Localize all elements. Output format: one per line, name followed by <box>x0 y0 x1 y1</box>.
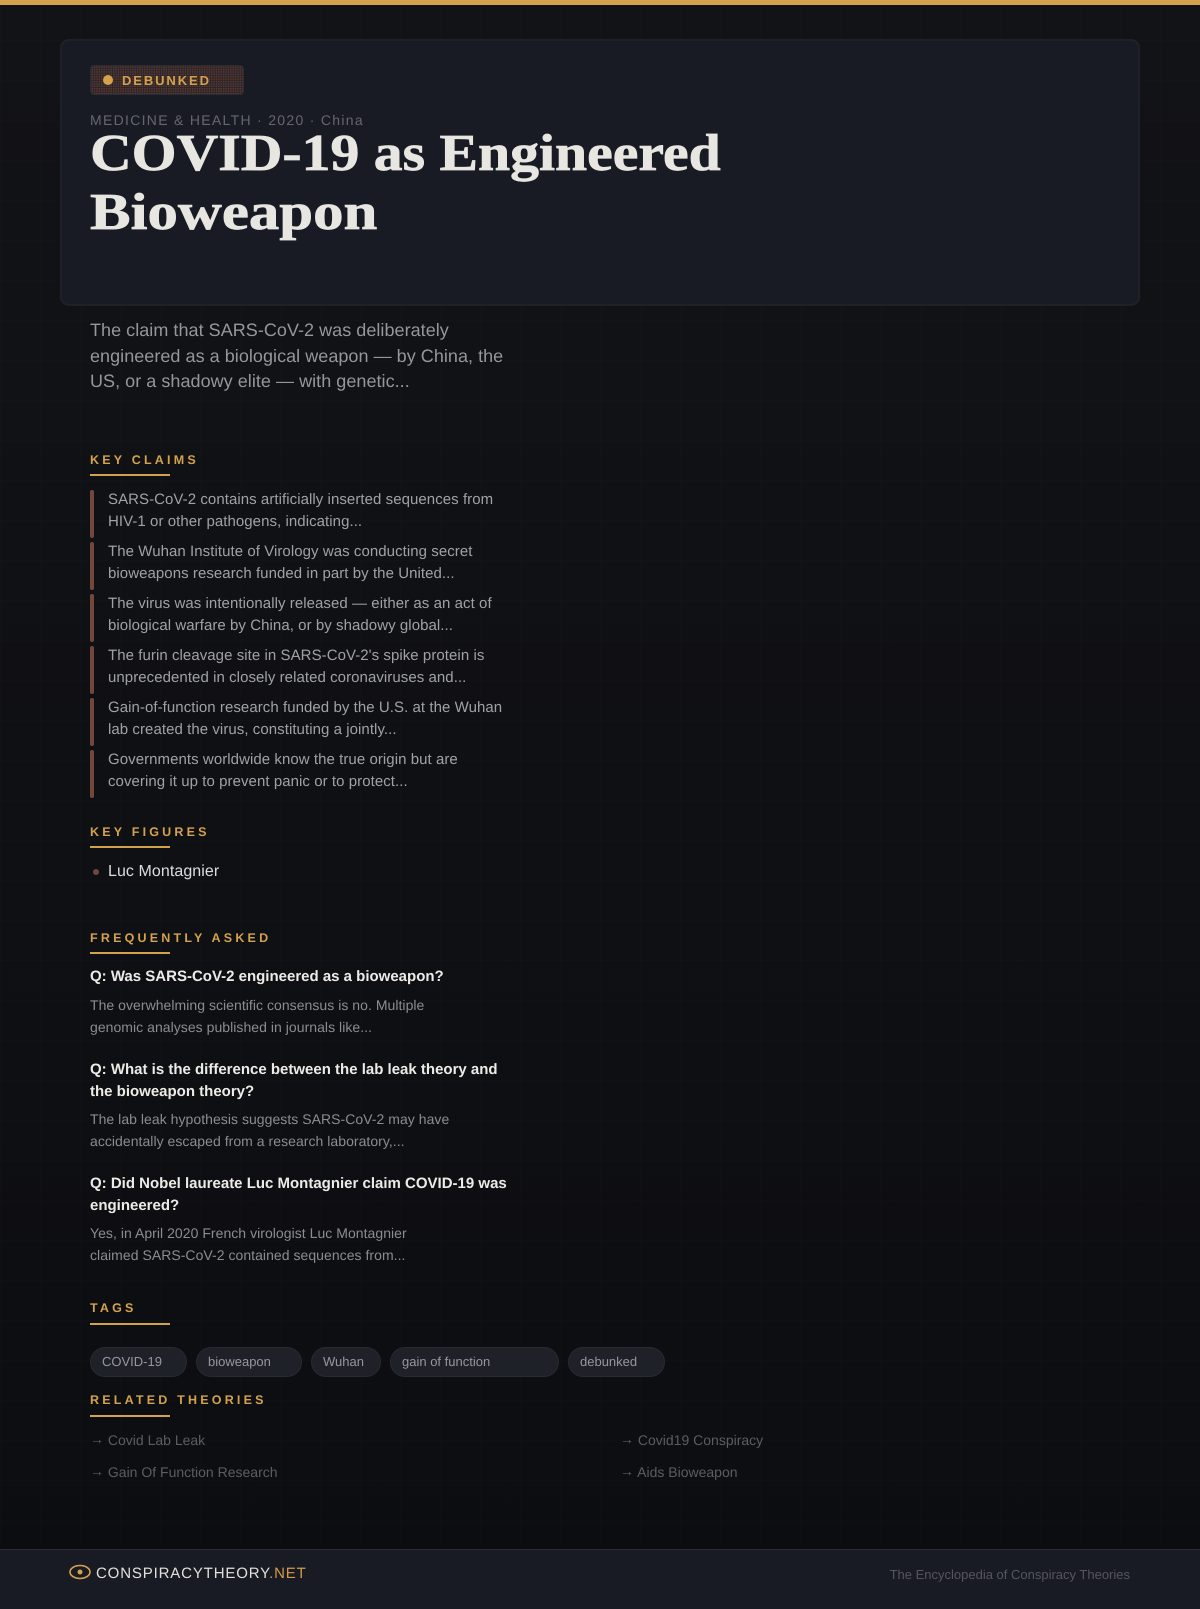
faq list: accidentally escaped from a research laboratory,... <box>90 1133 405 1149</box>
list: key claims: covering it up to prevent panic or to protect... <box>108 773 408 790</box>
faq list: Q: What is the difference between the lab leak theory and <box>90 1061 498 1078</box>
heading: key claims: KEY CLAIMS <box>90 453 199 467</box>
list: key claims: The Wuhan Institute of Virology was conducting secret <box>108 543 472 560</box>
heading: frequently asked: FREQUENTLY ASKED <box>90 931 271 945</box>
list: key claims: SARS-CoV-2 contains artificially inserted sequences from <box>108 491 493 508</box>
faq list: claimed SARS-CoV-2 contained sequences from... <box>90 1247 405 1263</box>
tag pills: bioweapon <box>208 1354 271 1369</box>
related theories links: → Gain Of Function Research <box>90 1463 278 1480</box>
footer <box>0 1549 1200 1609</box>
tag pills: COVID-19 <box>102 1354 162 1369</box>
title: COVID-19 as Engineered <box>90 125 721 182</box>
list: key claims: The furin cleavage site in SARS-CoV-2's spike protein is <box>108 647 484 664</box>
status badge: debunked <box>90 65 244 95</box>
panel: header card <box>60 39 1140 306</box>
related theories links: → Covid Lab Leak <box>90 1431 205 1448</box>
tag pills: gain of function <box>402 1354 490 1369</box>
list: key claims: bioweapons research funded in part by the United... <box>108 565 455 582</box>
list: key claims: HIV-1 or other pathogens, indicating... <box>108 513 362 530</box>
faq list: The overwhelming scientific consensus is no. Multiple <box>90 997 424 1013</box>
heading: related theories: RELATED THEORIES <box>90 1393 267 1407</box>
key figure: Luc Montagnier: Luc Montagnier <box>108 863 219 880</box>
faq list <box>90 968 507 1263</box>
list: key claims <box>90 490 502 798</box>
title <box>90 125 721 241</box>
faq list: The lab leak hypothesis suggests SARS-CoV-2 may have <box>90 1111 449 1127</box>
faq list: engineered? <box>90 1197 179 1214</box>
icon: eye logo <box>69 1564 91 1580</box>
list: key claims: lab created the virus, constituting a jointly... <box>108 721 397 738</box>
tag pills <box>90 1347 665 1377</box>
title: Bioweapon <box>90 184 377 241</box>
status badge: debunked: DEBUNKED <box>122 73 211 88</box>
footer tagline: The Encyclopedia of Conspiracy Theories <box>890 1567 1130 1582</box>
related theories links: → Covid19 Conspiracy <box>620 1431 763 1448</box>
heading: key figures: KEY FIGURES <box>90 825 210 839</box>
top accent bar <box>0 0 1200 5</box>
list: key claims: Gain-of-function research funded by the U.S. at the Wuhan <box>108 699 502 716</box>
faq list: Q: Was SARS-CoV-2 engineered as a bioweapon? <box>90 968 444 985</box>
faq list: Yes, in April 2020 French virologist Luc Montagnier <box>90 1225 407 1241</box>
heading: tags: TAGS <box>90 1301 137 1315</box>
related theories links: → Aids Bioweapon <box>620 1463 738 1480</box>
category line: MEDICINE & HEALTH · 2020 · China <box>90 112 364 128</box>
footer brand: CONSPIRACYTHEORY.NET <box>96 1565 307 1582</box>
intro text: The claim that SARS-CoV-2 was deliberately <box>90 320 449 340</box>
list: key claims: biological warfare by China, or by shadowy global... <box>108 617 453 634</box>
tag pills: debunked <box>580 1354 637 1369</box>
faq list: Q: Did Nobel laureate Luc Montagnier claim COVID-19 was <box>90 1175 507 1192</box>
faq list: the bioweapon theory? <box>90 1083 254 1100</box>
list: key claims: Governments worldwide know the true origin but are <box>108 751 458 768</box>
intro text: engineered as a biological weapon — by China, the <box>90 346 503 366</box>
list: key claims: unprecedented in closely related coronaviruses and... <box>108 669 466 686</box>
intro text <box>90 320 503 391</box>
intro text: US, or a shadowy elite — with genetic... <box>90 371 410 391</box>
list: key claims: The virus was intentionally released — either as an act of <box>108 595 492 612</box>
related theories links <box>90 1431 763 1480</box>
tag pills: Wuhan <box>323 1354 364 1369</box>
faq list: genomic analyses published in journals like... <box>90 1019 372 1035</box>
